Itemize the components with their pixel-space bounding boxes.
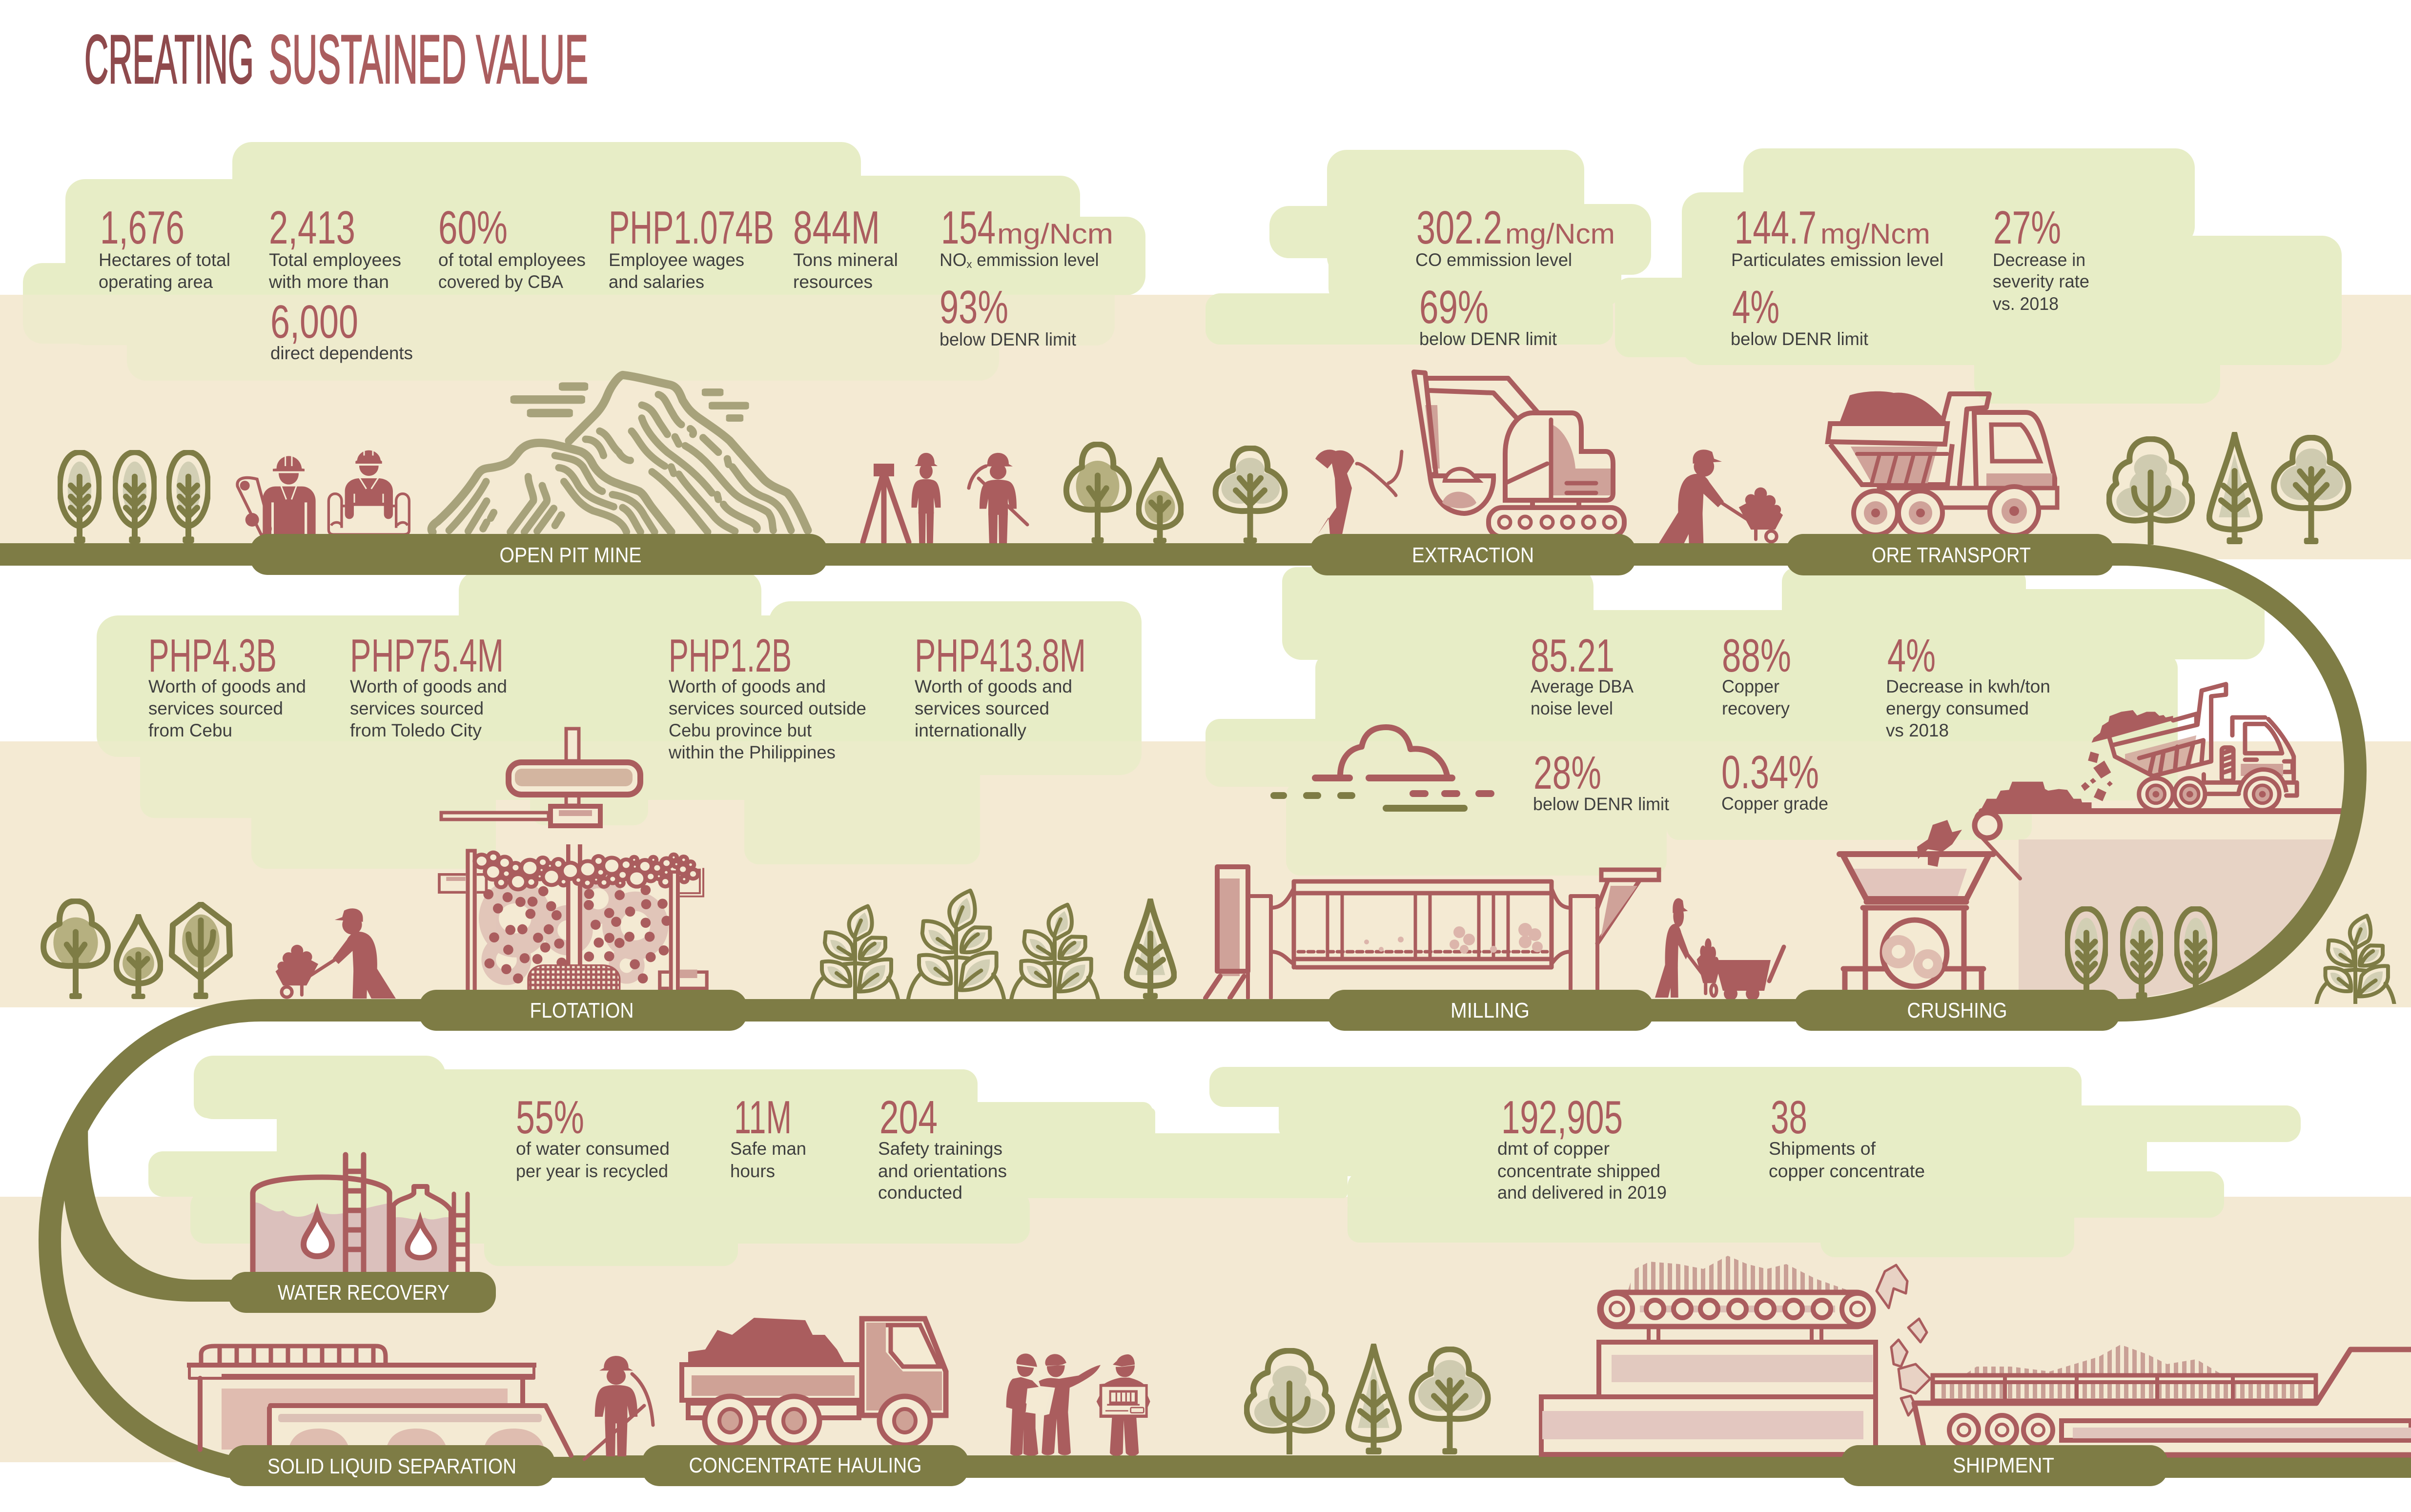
stat: safe man hours: hours xyxy=(730,1161,775,1181)
stat: CO xyxy=(1415,202,1615,349)
stat: employees: with more than xyxy=(268,272,389,292)
background band: row 3 xyxy=(0,1197,2411,1462)
stat: Philippines: services sourced outside xyxy=(669,698,866,718)
icon: dump truck tipping xyxy=(1982,684,2343,811)
stat: particulates: mg/Ncm xyxy=(1820,218,1930,250)
stat: copper recovery: Copper xyxy=(1722,676,1779,696)
stat: international xyxy=(915,630,1086,740)
stat: safe man hours: 11M xyxy=(734,1091,792,1144)
stat: safe man hours xyxy=(730,1091,806,1181)
stat: energy: vs 2018 xyxy=(1886,720,1949,740)
stat: NOx: NO xyxy=(940,250,966,270)
icon: conveyor and falling rock xyxy=(1917,811,2020,879)
stat: hectares: Hectares of total xyxy=(99,250,230,270)
stat: international: services sourced xyxy=(915,698,1049,718)
icon: solid liquid separation plant xyxy=(187,1346,571,1457)
stat: noise: 85.21 xyxy=(1531,630,1614,682)
stat: wages xyxy=(609,202,774,292)
stat: severity rate: vs. 2018 xyxy=(1993,294,2059,314)
stat: water: of water consumed xyxy=(516,1139,670,1159)
stat: trainings: and orientations xyxy=(878,1161,1007,1181)
road: row 1 with right arc and row 2 xyxy=(0,554,2411,1467)
stat: Philippines: within the Philippines xyxy=(668,742,836,762)
stat: copper recovery: recovery xyxy=(1722,698,1790,718)
stat: noise: Average DBA xyxy=(1531,676,1634,696)
stat: concentrate shipped: concentrate shipped xyxy=(1497,1161,1660,1181)
stat: NOx xyxy=(940,202,1113,349)
icon: ore dump truck xyxy=(1828,391,2057,535)
stat: severity rate: 27% xyxy=(1993,202,2061,254)
icon: managers xyxy=(237,450,409,535)
stat: wages: Employee wages xyxy=(609,250,744,270)
crushing plant backdrop xyxy=(2019,839,2340,999)
stat: concentrate shipped xyxy=(1497,1091,1667,1203)
stat: copper recovery: 88% xyxy=(1722,630,1791,682)
stat: shipments: 38 xyxy=(1771,1091,1807,1144)
icon: mill xyxy=(1206,867,1659,998)
stat: Philippines: Cebu province but xyxy=(669,720,812,740)
icon: three supervisors xyxy=(1006,1353,1150,1456)
stat: NOx: 154 xyxy=(941,202,996,254)
icon: worker with wheelbarrow xyxy=(1659,450,1783,543)
stat: Cebu xyxy=(148,630,306,740)
green cloud backdrop: row 1 left xyxy=(23,142,1145,381)
stat: CO: 69% xyxy=(1419,281,1489,333)
icon: water tanks xyxy=(253,1155,468,1272)
icon: trees after miner xyxy=(1066,444,1285,543)
stat: international: internationally xyxy=(915,720,1026,740)
stat: employees xyxy=(268,202,413,363)
stat: Toledo: Worth of goods and xyxy=(350,676,507,696)
stat: particulates: 144.7 xyxy=(1735,202,1817,254)
icon: worker with ore cart xyxy=(1655,898,1784,1001)
stat: Philippines: PHP1.2B xyxy=(669,630,792,682)
stat: particulates xyxy=(1731,202,1943,349)
stat: trainings: conducted xyxy=(878,1183,962,1203)
label: solid liquid separation: SOLID LIQUID SEPARATION xyxy=(267,1454,516,1478)
stat: energy xyxy=(1886,630,2050,740)
stat: energy: Decrease in kwh/ton xyxy=(1886,676,2050,696)
stat: Toledo xyxy=(350,630,507,740)
label: crushing: CRUSHING xyxy=(1907,999,2007,1022)
stat: water xyxy=(516,1091,670,1181)
stat: noise xyxy=(1531,630,1670,814)
icon: surveyor xyxy=(863,453,941,543)
background band: row 2 xyxy=(0,741,2411,1007)
icon: plant near arc xyxy=(2316,916,2394,1004)
stat: shipments: Shipments of xyxy=(1769,1139,1876,1159)
label: ore transport: ORE TRANSPORT xyxy=(1872,543,2031,567)
stat: international: PHP413.8M xyxy=(915,630,1086,682)
text: CREATING xyxy=(84,20,254,98)
stat: CO: CO emmission level xyxy=(1415,250,1572,270)
stat: CBA: 60% xyxy=(438,202,508,254)
stat: severity rate: severity rate xyxy=(1993,271,2089,291)
stat: Toledo: services sourced xyxy=(350,698,484,718)
stat: water: 55% xyxy=(516,1091,584,1144)
stat: Cebu: services sourced xyxy=(148,698,283,718)
stat: trainings: Safety trainings xyxy=(878,1139,1002,1159)
icon: excavator xyxy=(1414,372,1624,537)
icon: row 1 left trees xyxy=(60,452,208,543)
stat: employees: 2,413 xyxy=(269,202,355,254)
icon: row 2 left trees xyxy=(43,901,230,999)
stat: safe man hours: Safe man xyxy=(730,1139,806,1159)
stat: concentrate shipped: and delivered in 2019 xyxy=(1497,1183,1667,1203)
stat: CO: 302.2 xyxy=(1416,202,1502,254)
stat: concentrate shipped: dmt of copper xyxy=(1497,1139,1610,1159)
stat: trainings: 204 xyxy=(879,1091,938,1144)
icon: worker with pickaxe xyxy=(1315,450,1402,534)
label: open pit mine: OPEN PIT MINE xyxy=(500,543,641,567)
stat: mineral resources: resources xyxy=(793,272,873,292)
icon: concentrate truck xyxy=(682,1318,946,1445)
stat: Philippines: Worth of goods and xyxy=(669,676,826,696)
stat: copper recovery: Copper grade xyxy=(1721,794,1828,814)
stat: international: Worth of goods and xyxy=(915,676,1072,696)
stat: particulates: 4% xyxy=(1732,281,1779,333)
stat: Philippines xyxy=(668,630,866,762)
stat: CBA: of total employees xyxy=(438,250,586,270)
stat: water: per year is recycled xyxy=(516,1161,668,1181)
icon: row 1 right trees xyxy=(2109,434,2349,544)
icon: row 3 trees xyxy=(1246,1346,1488,1454)
icon: cloud with wind dashes xyxy=(1274,727,1491,808)
stat: severity rate xyxy=(1993,202,2089,314)
green cloud backdrop: row 3 xyxy=(148,1056,2301,1266)
icon: miner with pickaxe xyxy=(969,453,1027,545)
label: concentrate hauling: CONCENTRATE HAULING xyxy=(689,1453,921,1477)
road: pills and labels xyxy=(227,534,2168,1486)
label: extraction: EXTRACTION xyxy=(1412,543,1534,567)
stat: Toledo: from Toledo City xyxy=(350,720,482,740)
green cloud backdrop: row 2 left xyxy=(97,571,1142,869)
stat: NOx: 93% xyxy=(940,281,1008,333)
stat: CO: below DENR limit xyxy=(1419,329,1557,349)
stat: CO: mg/Ncm xyxy=(1505,218,1615,250)
stat: NOx: emmission level xyxy=(972,250,1099,270)
stat: employees: direct dependents xyxy=(270,343,413,363)
stat: trainings xyxy=(878,1091,1007,1203)
stat: hectares: operating area xyxy=(99,272,213,292)
stat: wages: PHP1.074B xyxy=(609,202,774,254)
stat: energy: energy consumed xyxy=(1886,698,2029,718)
stat: concentrate shipped: 192,905 xyxy=(1501,1091,1623,1144)
label: water recovery: WATER RECOVERY xyxy=(278,1281,450,1305)
stat: energy: 4% xyxy=(1887,630,1936,682)
stat: shipments xyxy=(1769,1091,1925,1181)
icon: crusher xyxy=(1839,854,1993,989)
stat: shipments: copper concentrate xyxy=(1769,1161,1925,1181)
icon: flotation cell xyxy=(439,729,707,990)
stat: NOx: x xyxy=(966,258,972,270)
stat: employees: 6,000 xyxy=(270,296,358,348)
stat: particulates: below DENR limit xyxy=(1731,329,1869,349)
stat: Cebu: PHP4.3B xyxy=(148,630,277,682)
icon: flying concentrate pieces xyxy=(1877,1265,1930,1415)
band veil over green xyxy=(0,295,2411,1462)
icon: plants row 2 xyxy=(812,891,1174,1000)
label: milling: MILLING xyxy=(1451,999,1530,1022)
stat: noise: below DENR limit xyxy=(1533,794,1670,814)
green cloud backdrop: row 2 right xyxy=(1206,567,2265,876)
stat: mineral resources: Tons mineral xyxy=(793,250,898,270)
stat: wages: and salaries xyxy=(609,272,704,292)
label: flotation: FLOTATION xyxy=(530,999,633,1022)
title accent: SUSTAINED VALUE xyxy=(269,20,588,98)
background band: row 1 xyxy=(0,295,2411,559)
label: shipment: SHIPMENT xyxy=(1953,1453,2054,1477)
icon: crushing trees xyxy=(2067,909,2215,999)
road: water recovery branch xyxy=(63,1118,234,1302)
stat: hectares: 1,676 xyxy=(100,202,184,254)
icon: miner with pick xyxy=(584,1356,653,1459)
stat: Toledo: PHP75.4M xyxy=(350,630,504,682)
stat: particulates: Particulates emission level xyxy=(1731,250,1943,270)
stat: noise: noise level xyxy=(1531,698,1613,718)
stat: CBA xyxy=(438,202,586,292)
icon: ship with cargo xyxy=(1913,1345,2411,1457)
stat: Cebu: from Cebu xyxy=(148,720,232,740)
stat: NOx: mg/Ncm xyxy=(997,218,1113,250)
stat: copper recovery xyxy=(1721,630,1828,814)
green cloud backdrop: row 1 right xyxy=(1206,148,2342,404)
stat: employees: Total employees xyxy=(269,250,401,270)
stat: mineral resources: 844M xyxy=(793,202,880,254)
stat: Cebu: Worth of goods and xyxy=(148,676,306,696)
stat: severity rate: Decrease in xyxy=(1993,250,2085,270)
stat: CBA: covered by CBA xyxy=(438,272,563,292)
stat: copper recovery: 0.34% xyxy=(1721,746,1819,798)
stat: mineral resources xyxy=(793,202,898,292)
icon: worker with wheelbarrow flipped xyxy=(275,908,396,999)
stat: NOx: below DENR limit xyxy=(940,329,1077,349)
stat: noise: 28% xyxy=(1533,747,1601,799)
stat: hectares xyxy=(99,202,230,292)
icon: mountain xyxy=(431,375,808,532)
icon: shipment conveyor and building xyxy=(1541,1256,1876,1454)
